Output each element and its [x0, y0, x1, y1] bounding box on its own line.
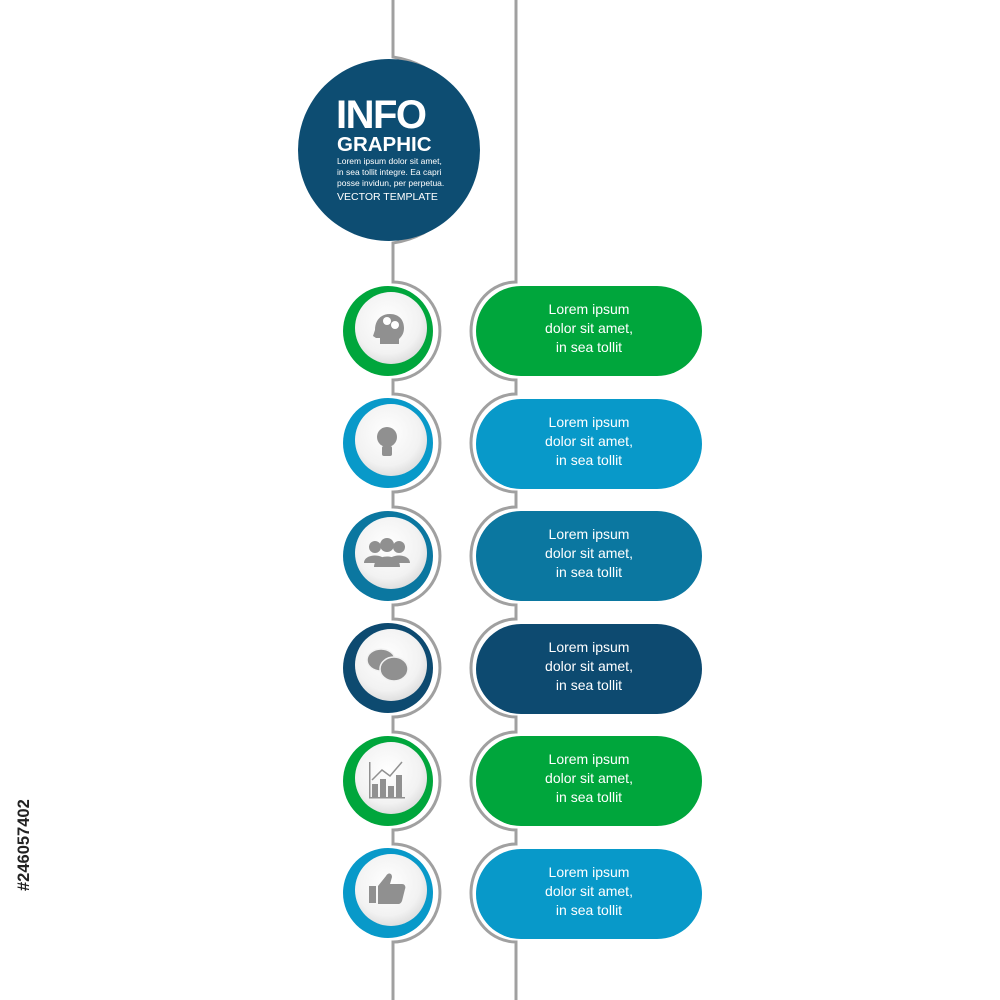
right connector line: [471, 0, 516, 1000]
step 2: Lorem ipsum: [549, 414, 629, 430]
title circle: VECTOR TEMPLATE: [337, 191, 438, 203]
icon: light bulb: [377, 427, 397, 456]
step 5: in sea tollit: [556, 789, 622, 805]
icon: head with gears: [373, 314, 404, 344]
step 4: dolor sit amet,: [545, 658, 633, 674]
step 6: dolor sit amet,: [545, 883, 633, 899]
step 4: Lorem ipsum: [549, 639, 629, 655]
step 6: Lorem ipsum: [549, 864, 629, 880]
step 2: [343, 398, 702, 489]
title circle: posse invidun, per perpetua.: [337, 178, 444, 188]
step 3: in sea tollit: [556, 564, 622, 580]
step 5: dolor sit amet,: [545, 770, 633, 786]
step 6: [343, 848, 702, 939]
title circle: INFO: [336, 93, 426, 137]
step 2: dolor sit amet,: [545, 433, 633, 449]
step 3: dolor sit amet,: [545, 545, 633, 561]
title circle: [298, 59, 480, 241]
icon: bar chart: [369, 762, 405, 798]
step 1: in sea tollit: [556, 339, 622, 355]
step 1: [343, 286, 702, 376]
step 1: Lorem ipsum: [549, 301, 629, 317]
step 6: in sea tollit: [556, 902, 622, 918]
step 2: in sea tollit: [556, 452, 622, 468]
step 3: Lorem ipsum: [549, 526, 629, 542]
title circle: GRAPHIC: [337, 133, 432, 156]
icon: speech bubbles: [367, 649, 408, 681]
step 5: [343, 736, 702, 826]
title circle: Lorem ipsum dolor sit amet,: [337, 156, 442, 166]
icon: group: [364, 538, 410, 567]
icon: thumbs up: [369, 873, 405, 904]
step 4: in sea tollit: [556, 677, 622, 693]
step 4: [343, 623, 702, 714]
title circle: in sea tollit integre. Ea capri: [337, 167, 442, 177]
step 1: dolor sit amet,: [545, 320, 633, 336]
left connector line: [393, 0, 473, 1000]
step 3: [343, 511, 702, 601]
stock id vertical text: #246057402: [15, 799, 33, 891]
step 5: Lorem ipsum: [549, 751, 629, 767]
